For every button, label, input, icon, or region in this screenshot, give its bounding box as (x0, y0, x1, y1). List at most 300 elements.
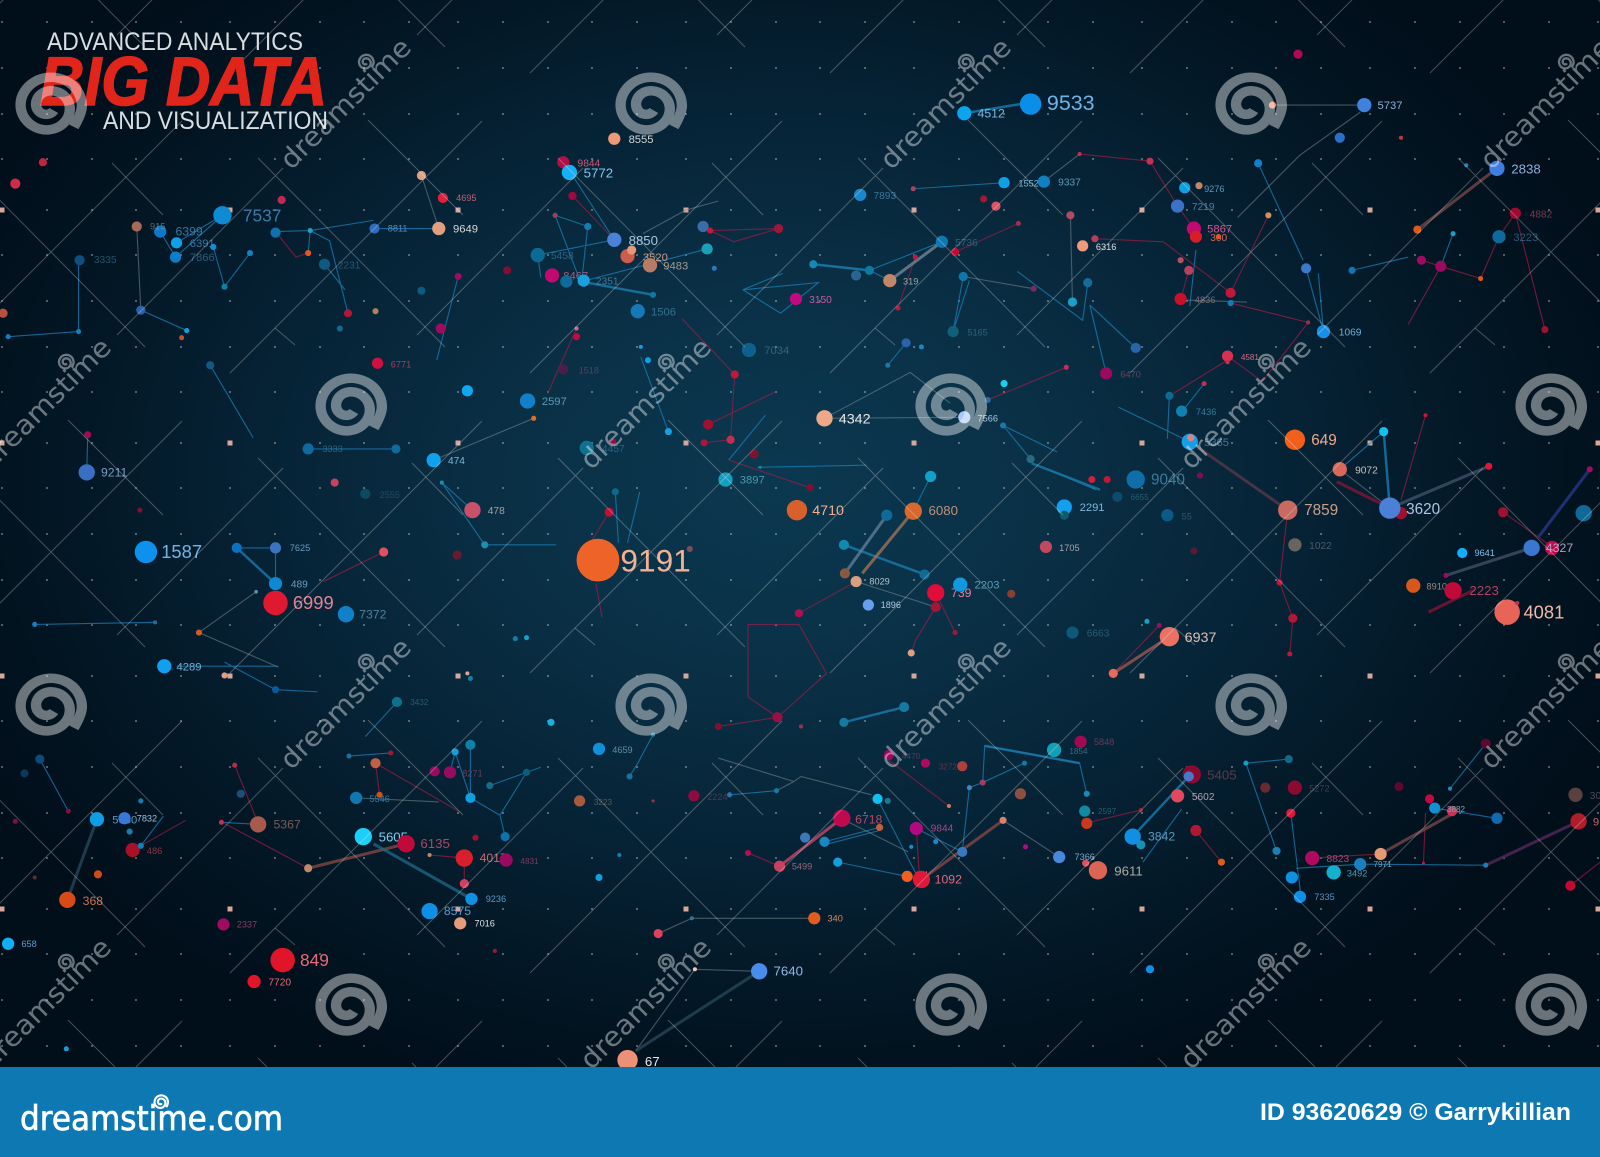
watermark text: dreamstime (1174, 332, 1318, 476)
node 1069: 1069 (1339, 328, 1362, 339)
node 7971: 7971 (1373, 860, 1392, 869)
node 1587 (135, 541, 202, 563)
node 7034: 7034 (764, 345, 789, 357)
nodes: upper right cluster (809, 49, 1553, 380)
node 3150 (790, 293, 832, 306)
node 3223 lower: 3223 (594, 798, 612, 807)
node 9072 (1333, 462, 1378, 476)
node 4470: 4470 (902, 752, 921, 761)
node 4081: 4081 (1523, 601, 1564, 622)
node 2224 (688, 790, 728, 802)
small dots (980, 739, 1576, 973)
node 486 (126, 843, 162, 857)
node 5736: 5736 (955, 238, 978, 249)
node 5867: 5867 (1207, 224, 1232, 236)
node 7436: 7436 (1196, 407, 1216, 417)
node 4081 (1494, 599, 1564, 625)
node 849: 849 (300, 950, 329, 970)
node 3223 lower (574, 795, 612, 807)
node 340: 340 (828, 913, 843, 923)
node 1022 (1288, 538, 1332, 552)
node 6655 (1112, 492, 1149, 502)
node 1092 (913, 871, 962, 888)
thick muted links (67, 168, 1590, 1051)
small dots (13, 635, 555, 1051)
node 2597: 2597 (542, 396, 567, 408)
node 4017: 4017 (480, 851, 507, 865)
stray red dots (10, 158, 426, 204)
node 2838 (1489, 161, 1541, 176)
title line: advanced analytics: ADVANCED ANALYTICS (47, 28, 303, 56)
node 7372: 7372 (359, 607, 387, 621)
node 9276: 9276 (1204, 184, 1224, 194)
node 2351: 2351 (596, 277, 619, 288)
node 3272: 3272 (939, 762, 957, 771)
node 7436 (1176, 406, 1216, 417)
node 7034 (742, 343, 789, 357)
node 2231: 2231 (338, 260, 361, 271)
node 4581: 4581 (1241, 353, 1259, 362)
footer logo: dreamstime.com (20, 1099, 283, 1139)
small dots (605, 365, 1069, 657)
node 8467: 8467 (563, 271, 588, 283)
node edge 3 (1568, 788, 1600, 802)
node 915: 915 (150, 222, 165, 232)
node 3520: 3520 (643, 252, 668, 264)
node 8811: 8811 (388, 224, 407, 234)
node 5499: 5499 (792, 861, 812, 871)
node 4457: 4457 (602, 444, 625, 455)
node 6399 (154, 225, 203, 239)
title line: big data: BIG DATA (40, 43, 327, 120)
node 3520 (620, 245, 668, 264)
node 4710 (787, 500, 844, 520)
node 3897 (718, 472, 765, 487)
node 5772 (562, 165, 613, 181)
footer credit: ID 93620629 © Garrykillian (1260, 1099, 1571, 1126)
node 7335: 7335 (1314, 892, 1335, 902)
node 6135 (397, 835, 450, 852)
node 2337: 2337 (237, 919, 257, 929)
small dots (32, 361, 536, 693)
watermark text: dreamstime (1174, 932, 1318, 1076)
strong blue links (237, 104, 1390, 837)
node 5546: 5546 (369, 794, 390, 804)
node 3842: 3842 (1148, 830, 1175, 844)
node 4342 (816, 410, 871, 427)
node 2597 (520, 393, 567, 409)
node 486: 486 (147, 846, 162, 856)
node 7832 (118, 812, 157, 824)
node 9276 (1179, 182, 1224, 194)
node edge red (1570, 813, 1600, 829)
nodes: bottom right cluster (980, 736, 1600, 973)
node 7720 (247, 975, 291, 989)
node 4289 (157, 659, 202, 673)
node 478: 478 (488, 506, 505, 517)
muted grey links (137, 105, 1390, 1051)
node 1092: 1092 (935, 873, 962, 887)
node 3492 (1327, 865, 1367, 879)
node 6316 (1077, 240, 1116, 252)
node 8575: 8575 (444, 904, 471, 918)
node 1587: 1587 (161, 541, 202, 562)
node 3432: 3432 (410, 698, 429, 707)
watermark text: dreamstime (874, 632, 1018, 776)
node 2597 lower (1079, 806, 1117, 829)
node 9191 (577, 539, 691, 582)
node 8575 (421, 903, 471, 919)
node 300 (1190, 231, 1228, 244)
node 5602 (1171, 789, 1215, 803)
node 478 (464, 502, 505, 518)
node 2291: 2291 (1080, 502, 1105, 514)
node 7625 (232, 542, 310, 554)
node 4831 (499, 853, 539, 867)
node 1518: 1518 (579, 365, 599, 375)
node 6316: 6316 (1096, 242, 1116, 252)
node 3492: 3492 (1347, 868, 1367, 878)
node 8029: 8029 (869, 577, 890, 587)
node 7971 (1354, 858, 1392, 870)
node 7640: 7640 (773, 963, 803, 978)
node 658: 658 (21, 939, 37, 949)
node 5737 (1357, 98, 1403, 112)
small dots (1088, 360, 1593, 678)
node 4695: 4695 (456, 193, 477, 203)
node 9337: 9337 (1058, 178, 1081, 189)
node 55 (1161, 509, 1192, 521)
small dots (809, 49, 1548, 368)
nodes: central band left (32, 361, 691, 693)
node 1518 (558, 364, 599, 375)
node 5405: 5405 (1207, 767, 1237, 782)
node 3620 (1379, 497, 1440, 519)
node 5272 (1288, 781, 1330, 795)
node 5736 (936, 236, 978, 249)
node 4342: 4342 (839, 411, 871, 427)
node 4831: 4831 (520, 857, 539, 866)
node 849 (270, 948, 329, 972)
title line: and visualization: AND VISUALIZATION (103, 107, 328, 135)
node 3272 (939, 761, 967, 771)
node 9483: 9483 (663, 260, 688, 272)
node 649 (1285, 430, 1337, 450)
node 8555 (608, 133, 654, 146)
node 5867 (1187, 221, 1232, 236)
node 1022: 1022 (1309, 541, 1332, 552)
node 2223: 2223 (1469, 583, 1499, 598)
node 1705: 1705 (1059, 543, 1080, 553)
node 9211: 9211 (101, 465, 128, 479)
node 5650 (90, 812, 137, 826)
node 4882 (1510, 208, 1553, 220)
node 8823: 8823 (1327, 854, 1350, 865)
node 7372 (338, 606, 387, 622)
node 5365: 5365 (1204, 437, 1229, 449)
node 2224: 2224 (707, 792, 728, 802)
node 5605: 5605 (379, 830, 408, 845)
node 6080: 6080 (929, 503, 958, 518)
node 2223 (1444, 582, 1499, 599)
node 6391: 6391 (190, 238, 215, 250)
node 6937 (1160, 627, 1216, 646)
nodes: top left cluster (0, 158, 478, 340)
node 5848 (1074, 736, 1114, 748)
node 5458: 5458 (551, 251, 574, 262)
node 6470: 6470 (1120, 370, 1141, 380)
node 5499 (774, 861, 812, 872)
node 5365 (1182, 434, 1229, 450)
node 5650: 5650 (112, 814, 137, 826)
small dots (0, 228, 462, 340)
node 9611: 9611 (1114, 863, 1143, 878)
node 6999 (263, 591, 334, 615)
node 9483 (643, 258, 688, 272)
node 9072: 9072 (1355, 465, 1378, 476)
footer logo spiral (155, 1095, 168, 1108)
node 3897: 3897 (740, 475, 765, 487)
node 6999: 6999 (293, 592, 334, 613)
node 5602: 5602 (1192, 792, 1215, 803)
node 5165 (947, 326, 988, 338)
node 8029 (851, 576, 890, 587)
node 8271: 8271 (462, 768, 483, 778)
node 6135: 6135 (420, 836, 450, 851)
node 8823 (1305, 851, 1350, 865)
node 2337 (217, 918, 257, 930)
cyan hub: 1854 (1069, 747, 1088, 756)
node 6655: 6655 (1131, 493, 1149, 502)
small dots (595, 702, 1028, 971)
node 7859 (1278, 500, 1338, 520)
node 1552: 1552 (1018, 179, 1039, 189)
node 9649: 9649 (453, 224, 478, 236)
node 5405 (1183, 765, 1237, 784)
node 3335: 3335 (94, 255, 117, 266)
node 2203 (953, 577, 999, 592)
node 3842 (1124, 828, 1175, 849)
node 4512: 4512 (978, 106, 1005, 120)
node 368: 368 (83, 894, 103, 908)
node 5272: 5272 (1309, 784, 1330, 794)
node 6663 (1066, 626, 1110, 640)
title (40, 28, 328, 135)
node 3432 (392, 697, 429, 707)
node 6399: 6399 (176, 225, 203, 239)
node 9236: 9236 (486, 894, 506, 904)
node 7625: 7625 (290, 543, 310, 553)
node 4695 (438, 193, 477, 203)
node 4659: 4659 (612, 745, 633, 755)
node 1506 (631, 304, 676, 318)
red network links (141, 154, 1600, 886)
node 7335 (1294, 891, 1335, 903)
watermark text: dreamstime (874, 32, 1018, 176)
node 2203: 2203 (974, 580, 999, 592)
node 658 (2, 938, 37, 950)
node 7866: 7866 (190, 252, 215, 264)
node 7537 (213, 205, 281, 225)
node 7640 (751, 963, 803, 979)
small dots (503, 192, 783, 379)
node 489: 489 (291, 580, 308, 591)
node 4882: 4882 (1530, 209, 1553, 220)
node 7366: 7366 (1074, 852, 1095, 862)
node 368 (59, 892, 103, 908)
watermark text: dreamstime (274, 32, 418, 176)
node 3620: 3620 (1406, 501, 1440, 518)
node 3882: 3882 (1447, 805, 1466, 814)
node 6391 (171, 237, 215, 250)
node 7537: 7537 (243, 205, 281, 225)
node 9191: 9191 (620, 542, 691, 578)
watermark text: dreamstime (574, 932, 718, 1076)
node 4327 (1523, 540, 1573, 556)
node 5848: 5848 (1094, 737, 1114, 747)
node 300: 300 (1210, 233, 1228, 244)
node 4470 (884, 750, 921, 761)
node 2555 (360, 489, 400, 500)
node 9844: 9844 (578, 158, 601, 169)
node 9844 (557, 156, 601, 169)
node 915 (132, 221, 165, 232)
node 1896 (863, 599, 901, 611)
node 5605 (355, 828, 408, 845)
node 474: 474 (448, 456, 465, 467)
nodes: bottom left cluster (2, 635, 633, 1051)
node 7016: 7016 (474, 918, 495, 928)
node 340 (808, 912, 843, 924)
node 5772: 5772 (584, 166, 613, 181)
node 739 (927, 584, 972, 601)
node 55: 55 (1182, 511, 1192, 521)
node 4457 (580, 441, 625, 455)
node 1552 (998, 177, 1039, 189)
node 5367: 5367 (273, 817, 301, 831)
node 3150: 3150 (809, 295, 832, 306)
node 2597 lower: 2597 (1098, 807, 1117, 816)
node 6718 (833, 810, 883, 827)
node 7893: 7893 (873, 191, 896, 202)
node 4327: 4327 (1546, 541, 1573, 555)
node 8555: 8555 (629, 134, 654, 146)
node 67 (617, 1050, 660, 1070)
node 1069 (1317, 325, 1362, 339)
node 7720: 7720 (268, 978, 291, 989)
node 7219: 7219 (1192, 202, 1215, 213)
node 7219 (1171, 199, 1215, 213)
node 8271 (430, 766, 483, 778)
node 5458 (531, 248, 574, 262)
node 9211 (79, 464, 128, 481)
node 2351 (560, 274, 619, 288)
node 7016 (454, 917, 495, 929)
node 1506: 1506 (651, 306, 676, 318)
watermark text: dreamstime (274, 632, 418, 776)
nodes: central band right (1040, 360, 1593, 678)
cyan hub (1047, 743, 1088, 757)
node 6470 (1100, 367, 1141, 380)
node 9337 (1038, 175, 1081, 189)
node 5367 (250, 816, 301, 833)
node 6080 (905, 502, 958, 520)
node 3335 (74, 255, 117, 266)
node 4017 (456, 849, 507, 867)
node 5165: 5165 (967, 328, 988, 338)
nodes: central band middle (605, 365, 1069, 657)
node 9236 (465, 893, 506, 905)
node 9533: 9533 (1047, 91, 1095, 115)
node 6663: 6663 (1087, 629, 1110, 640)
node 5737: 5737 (1378, 100, 1403, 112)
nodes: upper centre cluster (372, 133, 832, 379)
node 8910 (1406, 578, 1447, 593)
node 4710: 4710 (812, 503, 844, 519)
node 3882 (1429, 802, 1466, 816)
node 2291 (1057, 499, 1105, 520)
node 1705 (1040, 541, 1080, 553)
node 4581 (1222, 350, 1259, 362)
node 9641: 9641 (1474, 548, 1495, 558)
node 7893 (854, 189, 896, 202)
node 7832: 7832 (137, 813, 157, 823)
node 2231 (319, 259, 361, 271)
node 9040: 9040 (1151, 472, 1185, 489)
node 5546 (350, 792, 390, 804)
node 4659 (593, 743, 633, 755)
node 8811 (369, 223, 407, 234)
node 1896: 1896 (881, 600, 901, 610)
node 6771 (372, 358, 411, 369)
node 7566: 7566 (978, 413, 998, 423)
node 9040 (1127, 470, 1185, 489)
node 8850 (607, 233, 658, 248)
node 474 (427, 453, 465, 467)
node 8467 (545, 268, 588, 283)
node 7866 (170, 251, 215, 264)
node 4836 (1174, 293, 1215, 305)
node 8910: 8910 (1427, 582, 1447, 592)
node 649: 649 (1311, 432, 1337, 449)
node 3223 (1492, 230, 1538, 244)
node 67: 67 (645, 1054, 660, 1069)
node 489 (269, 577, 308, 591)
node 7566 (958, 411, 998, 423)
blue network links (8, 163, 1497, 897)
node 6718: 6718 (855, 812, 883, 826)
node 8850: 8850 (629, 233, 658, 248)
node 9611 (1082, 860, 1143, 879)
node 9649 (432, 222, 478, 236)
footer bar (0, 1067, 1600, 1157)
node 484: 484 (914, 870, 928, 879)
node 9844 lower (910, 822, 954, 835)
node 3333: 3333 (322, 444, 343, 454)
node 4512 (957, 106, 1005, 120)
node 319: 319 (903, 277, 918, 287)
node 484 (902, 870, 928, 882)
node 3223: 3223 (1513, 232, 1538, 244)
node 3333 (303, 443, 401, 455)
node 9641 (1457, 548, 1495, 558)
node 7859: 7859 (1304, 502, 1338, 519)
node 4836: 4836 (1195, 295, 1215, 305)
node 2838: 2838 (1511, 161, 1541, 176)
watermark text: dreamstime (574, 332, 718, 476)
node 7366 (1053, 851, 1095, 863)
node 4289: 4289 (177, 661, 202, 673)
